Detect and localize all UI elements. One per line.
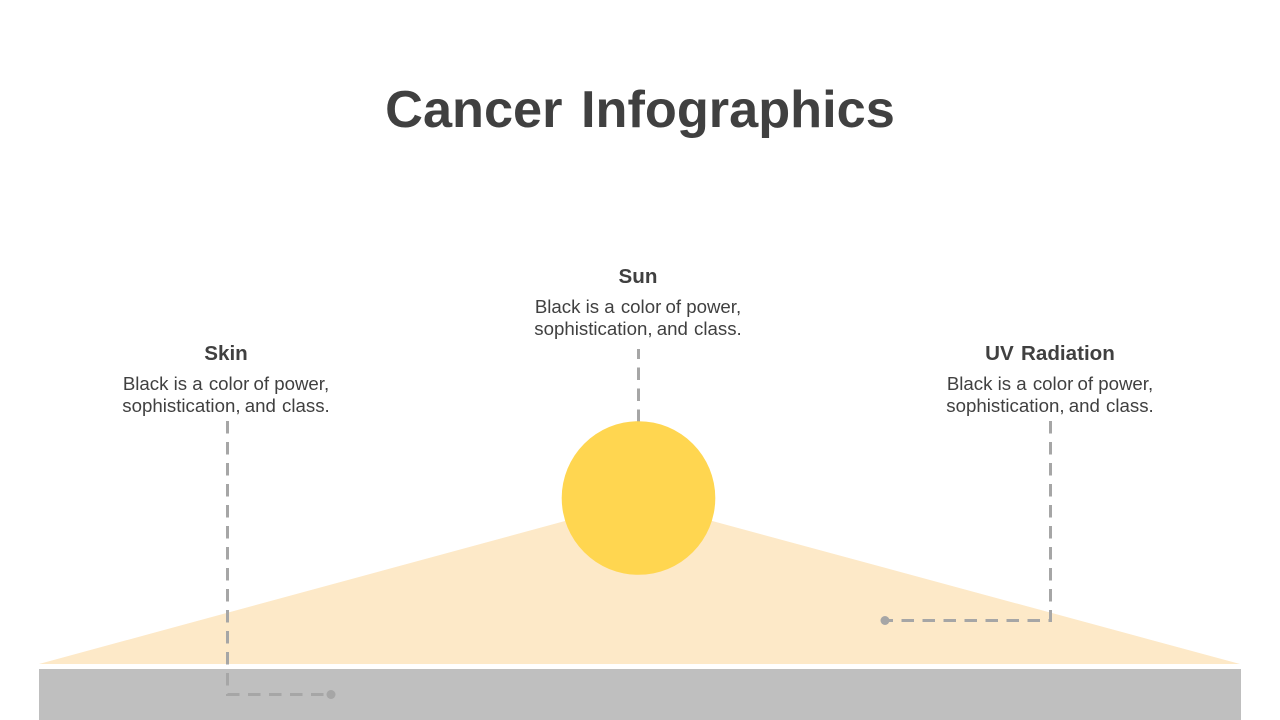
sun circle (562, 421, 715, 575)
light beam triangle (39, 501, 1240, 664)
title: Cancer Infographics (385, 81, 895, 139)
text block: sun (534, 265, 742, 339)
connector: skin (228, 421, 336, 699)
connector: sun (637, 349, 640, 422)
connector: UV radiation (880, 421, 1050, 625)
text block: skin: Black is a color of power, (123, 373, 329, 394)
text block: UV radiation: Black is a color of power, (947, 373, 1153, 394)
text block: UV radiation: sophistication, and class. (946, 395, 1154, 416)
text block: UV radiation (946, 342, 1154, 416)
text block: sun: Sun (619, 265, 657, 288)
text block: UV radiation: UV Radiation (985, 342, 1115, 365)
text block: sun: sophistication, and class. (534, 318, 742, 339)
text block: skin (122, 342, 330, 416)
text block: sun: Black is a color of power, (535, 296, 741, 317)
text block: skin: sophistication, and class. (122, 395, 330, 416)
text block: skin: Skin (204, 342, 248, 365)
ground bar (39, 669, 1241, 720)
